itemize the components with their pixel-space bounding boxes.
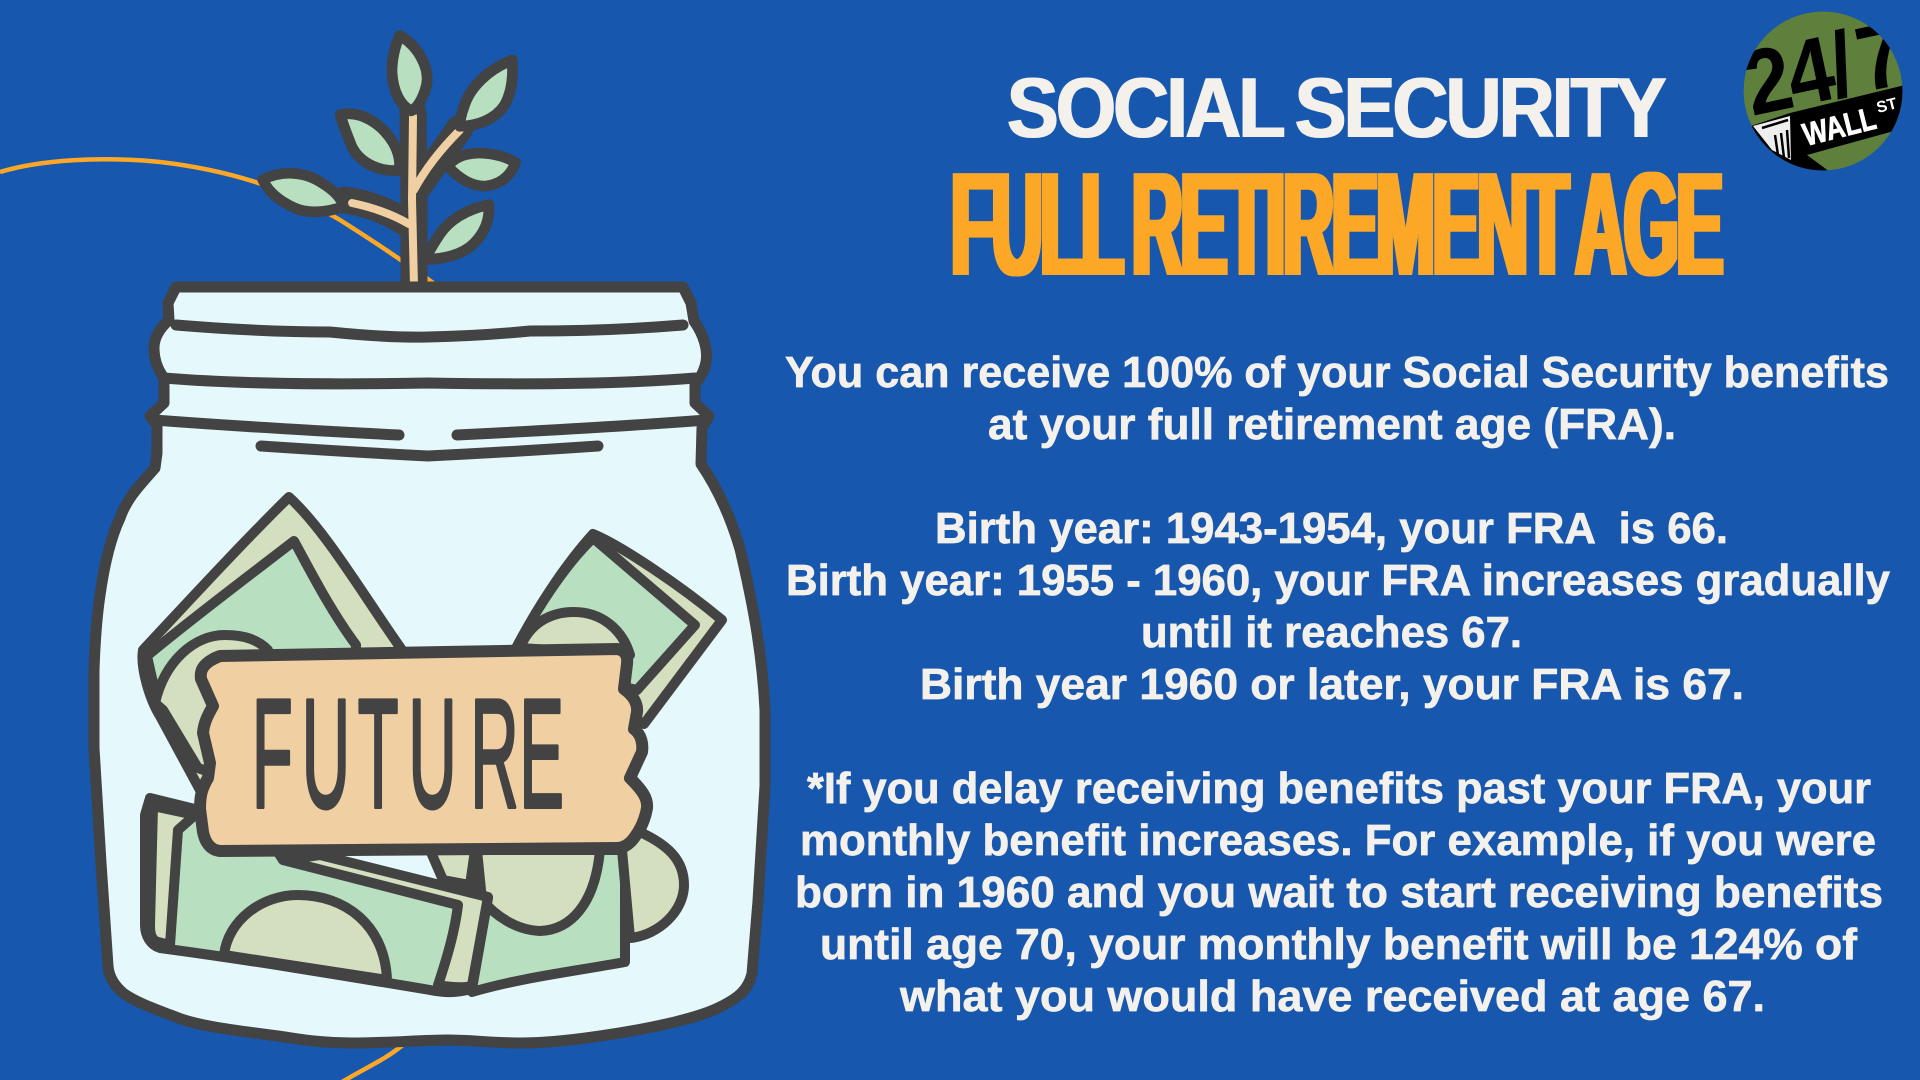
logo numerals: 24/7: [1735, 1, 1914, 136]
lower right bill: [430, 832, 684, 992]
delay note paragraph: born in 1960 and you wait to start receiving benefits: [795, 868, 1883, 917]
orange arc: [0, 159, 440, 1080]
top left bill: [142, 497, 402, 800]
future label: [200, 649, 647, 851]
top right bill: [510, 534, 722, 724]
leaves: [263, 36, 516, 259]
logo: [1744, 12, 1902, 170]
delay note paragraph: until age 70, your monthly benefit will be 124% of: [820, 920, 1857, 969]
intro paragraph: You can receive 100% of your Social Security benefits: [785, 348, 1889, 397]
birth year paragraph: [786, 504, 1891, 709]
body text: [785, 348, 1891, 1021]
plant: [263, 36, 516, 288]
money: [142, 497, 722, 992]
jar lines: [154, 325, 707, 456]
logo superscript: ST: [1875, 95, 1899, 117]
illustration: plant in money jar: [94, 36, 765, 1043]
delay note paragraph: what you would have received at age 67.: [899, 972, 1765, 1021]
lower left bill: [145, 798, 488, 992]
birth year paragraph: Birth year: 1955 - 1960, your FRA increases gradually: [786, 556, 1891, 605]
delay note paragraph: monthly benefit increases. For example, if you were: [800, 816, 1876, 865]
birth year paragraph: Birth year: 1943-1954, your FRA is 66.: [935, 504, 1728, 553]
logo wordmark: WALL: [1799, 100, 1879, 153]
intro paragraph: at your full retirement age (FRA).: [988, 400, 1676, 449]
jar: [94, 287, 765, 1043]
birth year paragraph: Birth year 1960 or later, your FRA is 67.: [920, 660, 1744, 709]
delay note paragraph: [795, 764, 1883, 1021]
delay note paragraph: *If you delay receiving benefits past your FRA, your: [807, 764, 1871, 813]
title: social security: SOCIAL SECURITY: [1007, 61, 1666, 156]
birth year paragraph: until it reaches 67.: [1141, 608, 1522, 657]
intro paragraph: [785, 348, 1889, 449]
label text: FUTURE: [252, 668, 564, 841]
